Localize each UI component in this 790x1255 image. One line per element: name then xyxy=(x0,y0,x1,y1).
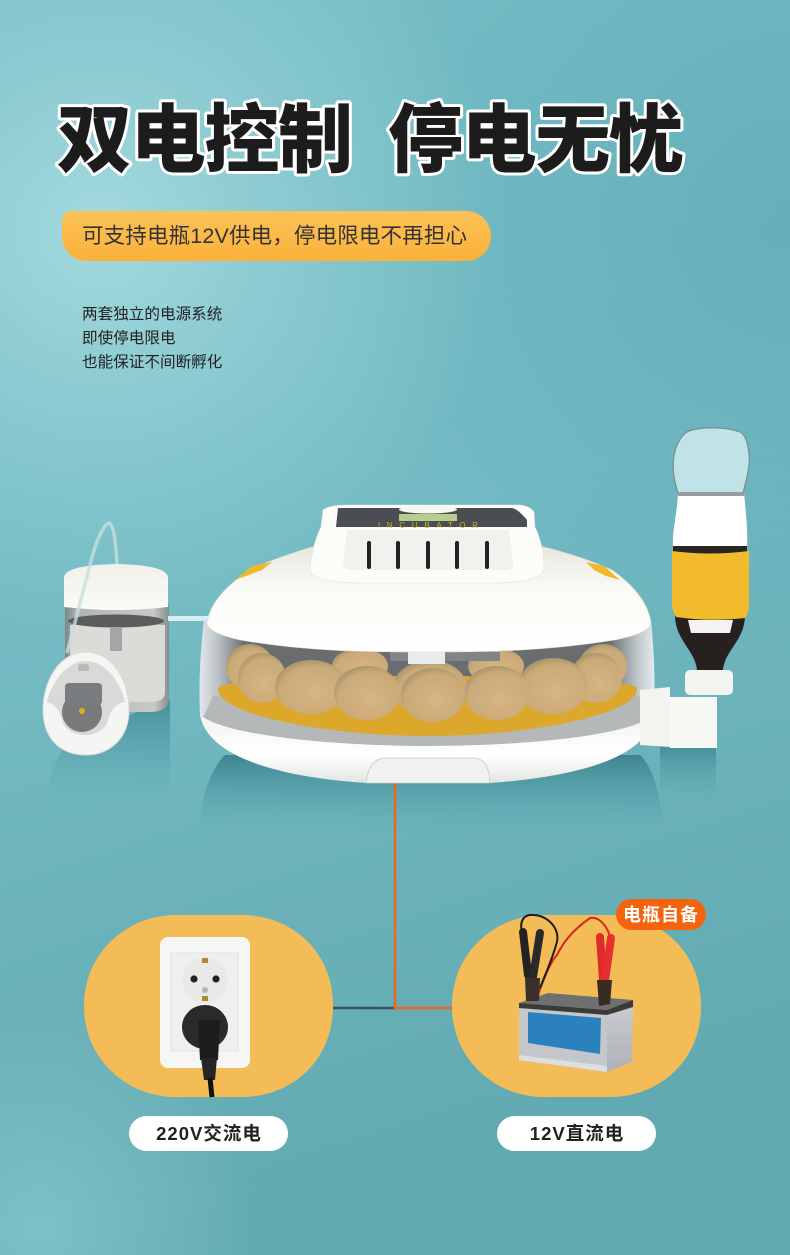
icon: car battery xyxy=(519,993,633,1072)
bottle cap collar xyxy=(685,670,733,695)
description text xyxy=(82,305,222,371)
icon: wall socket xyxy=(160,937,250,1097)
water bottle xyxy=(640,428,749,748)
incubator xyxy=(200,505,655,783)
tank lid xyxy=(64,564,168,610)
grey tray bed xyxy=(204,696,650,750)
lower base xyxy=(200,714,654,783)
bottle neck xyxy=(675,615,745,670)
description text: 也能保证不间断孵化 xyxy=(82,353,222,371)
stand xyxy=(640,687,670,747)
yellow sleeve xyxy=(672,551,749,620)
bottle upper xyxy=(673,493,747,548)
drawer handle xyxy=(366,758,490,783)
dome lid xyxy=(207,546,651,652)
centre hinge xyxy=(390,652,500,661)
subtitle pill: 可支持电瓶12V供电，停电限电不再担心 xyxy=(82,224,467,248)
humidifier tank xyxy=(64,523,208,712)
tank body xyxy=(65,605,169,712)
icon: black clamp xyxy=(521,915,557,1001)
label: 220V: 220V交流电 xyxy=(156,1123,262,1144)
dark water band xyxy=(673,546,747,556)
yellow latches xyxy=(235,562,272,580)
description text: 即使停电限电 xyxy=(82,329,176,347)
control housing xyxy=(310,505,544,583)
floor reflections xyxy=(46,700,716,830)
title: 停电无忧 xyxy=(388,98,684,182)
label: 220V xyxy=(129,1116,288,1151)
title: 双电控制 xyxy=(57,98,353,182)
icon: power plug xyxy=(182,1005,228,1097)
badge: 电瓶自备 xyxy=(623,905,699,925)
socket disc xyxy=(84,915,333,1097)
description text: 两套独立的电源系统 xyxy=(82,305,222,323)
water pump xyxy=(43,652,129,755)
glass window xyxy=(200,620,655,716)
label: 12V xyxy=(497,1116,656,1151)
control panel xyxy=(336,508,527,527)
bottle base xyxy=(673,428,749,493)
water level xyxy=(70,625,165,702)
outlet pipe xyxy=(168,616,208,621)
eggs xyxy=(226,644,627,722)
pump rotor xyxy=(62,692,102,732)
connector lines xyxy=(333,783,452,1008)
subtitle pill xyxy=(62,211,491,261)
badge xyxy=(616,899,706,930)
icon: red clamp xyxy=(538,918,612,1006)
vent slots xyxy=(367,541,489,569)
title xyxy=(57,98,684,182)
battery disc xyxy=(452,899,706,1097)
yellow turning tray xyxy=(218,676,637,736)
silicone tube xyxy=(67,523,117,653)
incubator: INCUBATOR xyxy=(378,521,478,530)
label: 12V: 12V直流电 xyxy=(530,1123,624,1144)
